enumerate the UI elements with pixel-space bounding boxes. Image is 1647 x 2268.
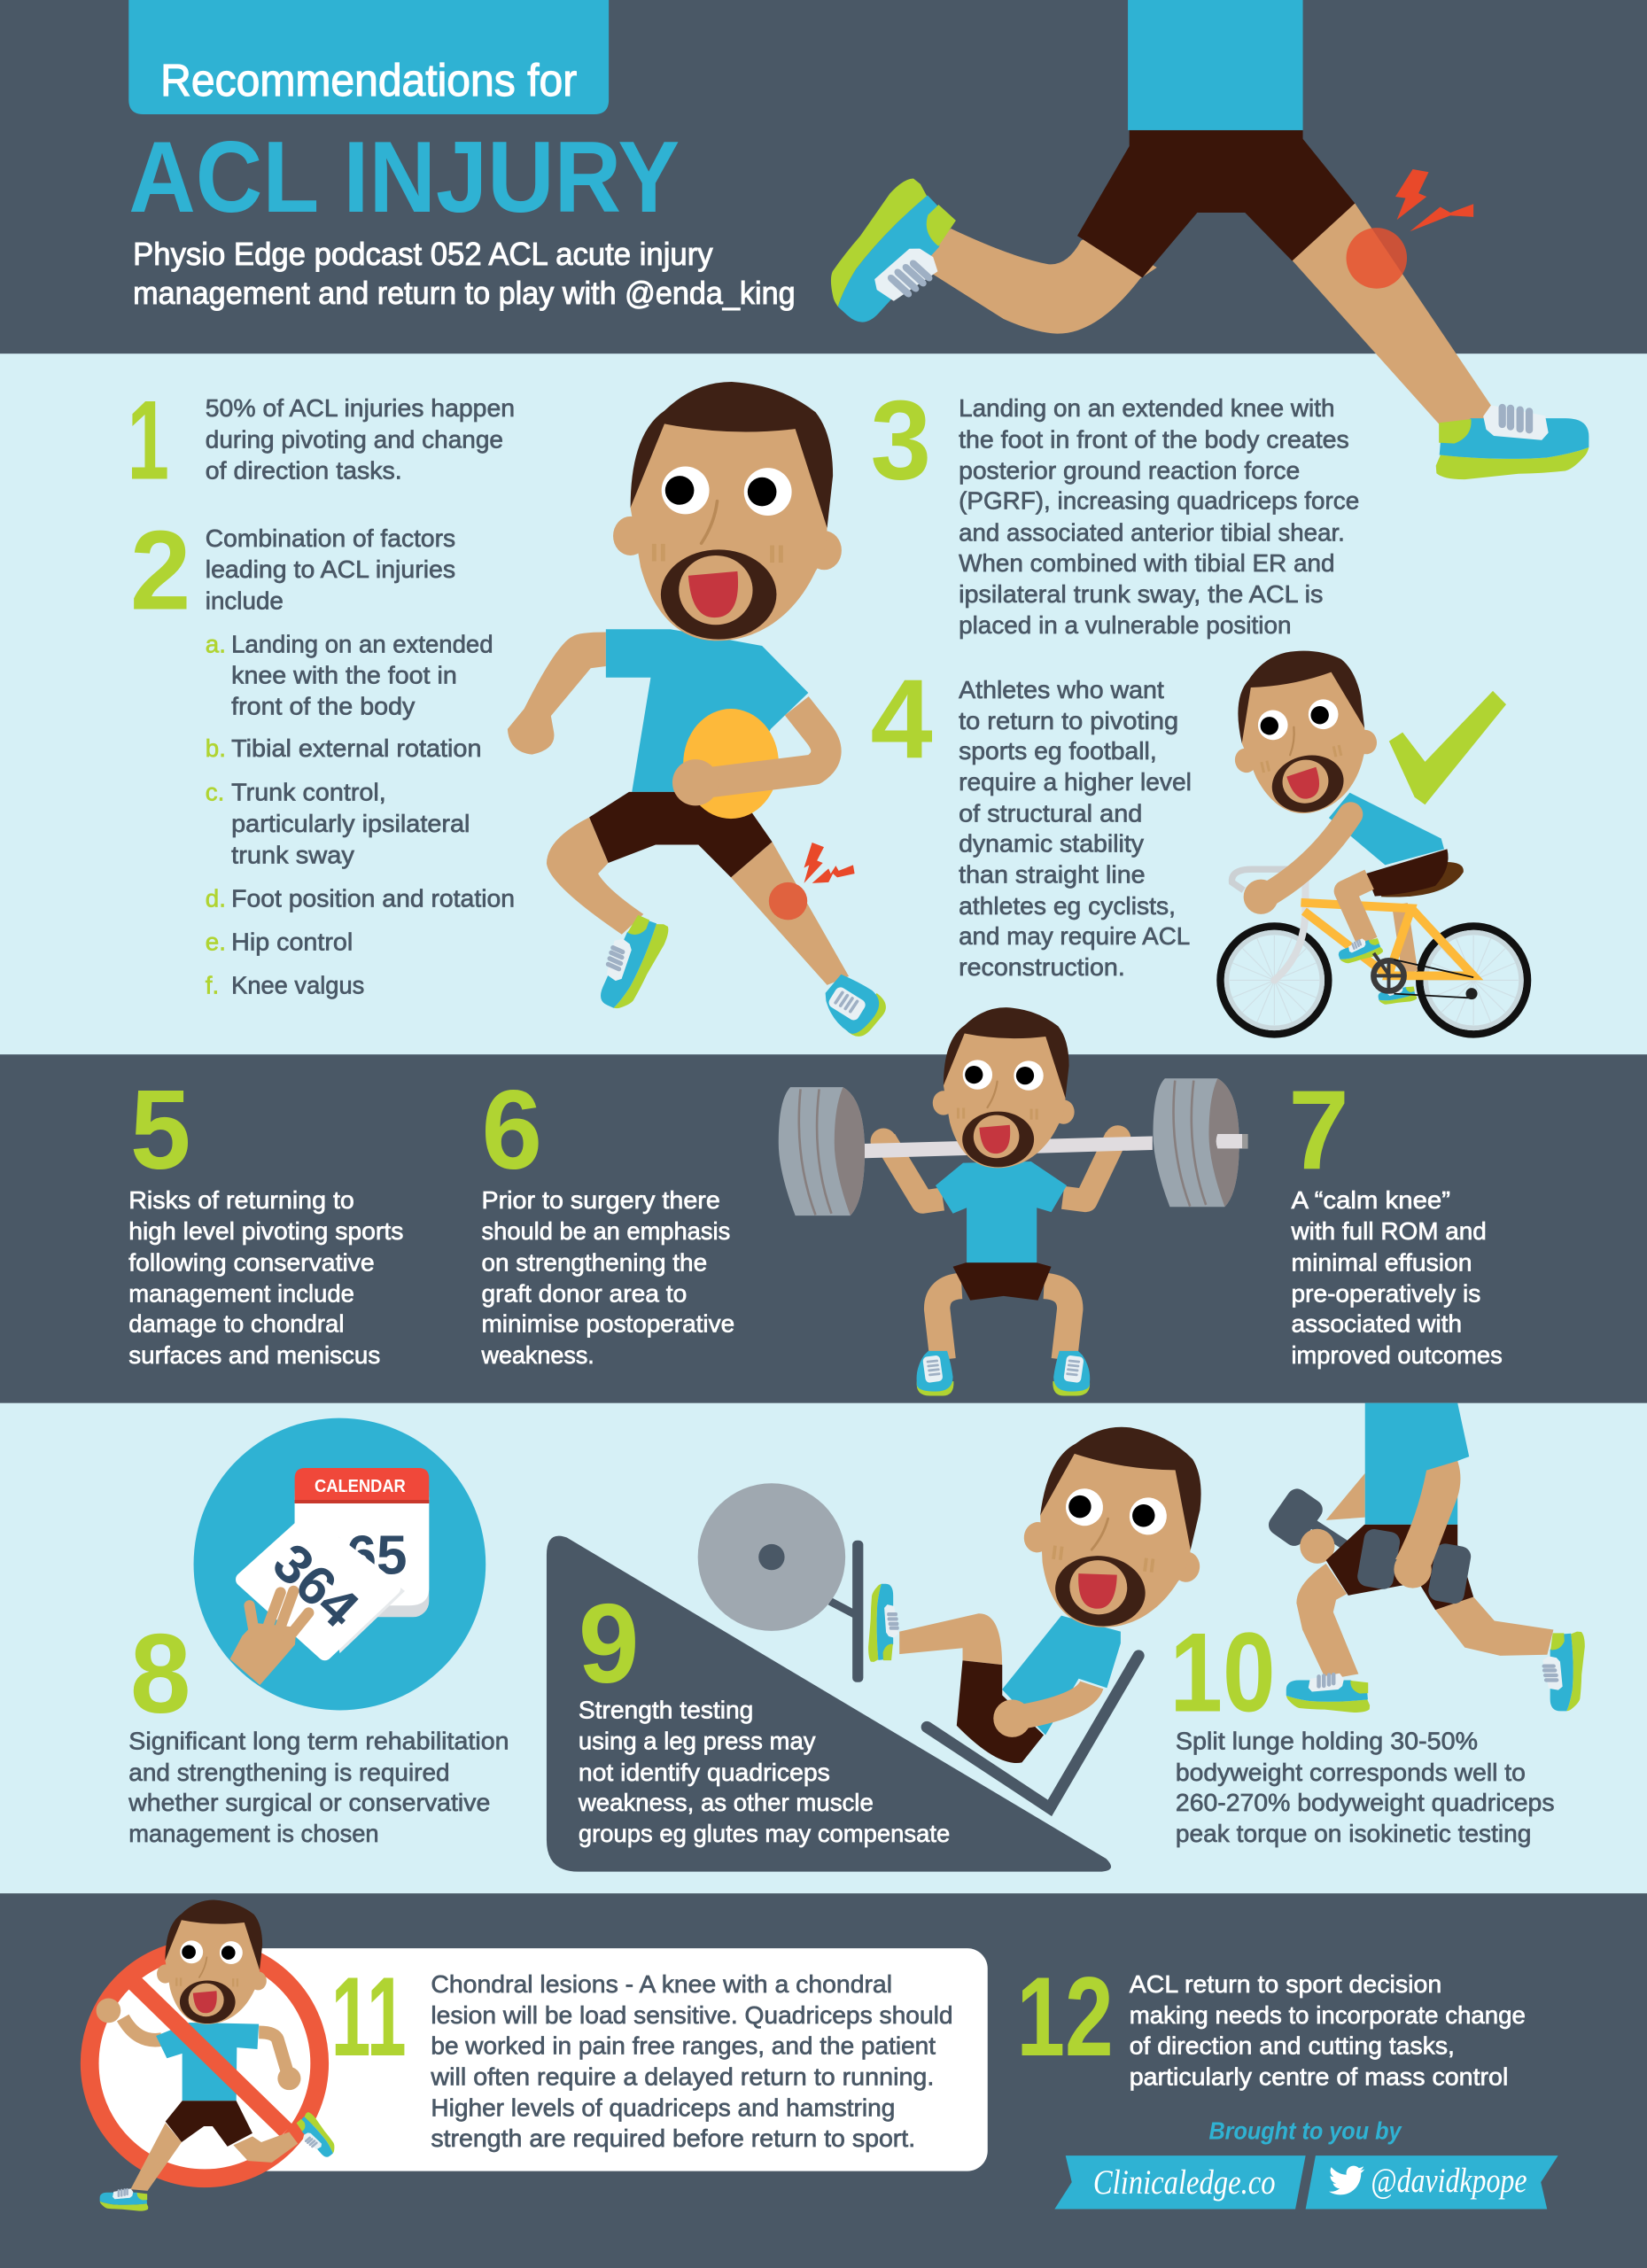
item 6: weakness. (481, 1341, 594, 1369)
item 5: high level pivoting sports (128, 1217, 403, 1245)
item 5: Risks of returning to (128, 1186, 354, 1214)
item 8: and strengthening is required (128, 1759, 450, 1786)
item 3: placed in a vulnerable position (959, 611, 1291, 639)
item 4: to return to pivoting (959, 707, 1178, 734)
item 2: 2 (130, 507, 190, 633)
subtitle: Physio Edge podcast 052 ACL acute injury (133, 236, 713, 272)
item 2: leading to ACL injuries (206, 555, 455, 583)
item 2: Trunk control, (231, 779, 386, 806)
item 7: associated with (1291, 1310, 1462, 1338)
item 3: ipsilateral trunk sway, the ACL is (959, 580, 1323, 608)
illustration: squat with barbell (779, 1007, 1248, 1396)
item 5 (128, 1067, 403, 1369)
item 10: Split lunge holding 30-50% (1176, 1728, 1478, 1755)
item 2: f. (206, 972, 219, 999)
ribbon: Clinicaledge: Clinicaledge.co (1093, 2163, 1276, 2202)
item 7: 7 (1288, 1067, 1349, 1192)
calendar illustration: CALENDAR (315, 1477, 406, 1496)
item 6: 6 (482, 1067, 542, 1192)
item 5: 5 (130, 1067, 190, 1192)
item 4 (871, 656, 1192, 981)
item 2: Knee valgus (231, 972, 364, 999)
item 1: of direction tasks. (206, 456, 402, 484)
item 12: particularly centre of mass control (1130, 2062, 1508, 2090)
item 2: front of the body (231, 693, 416, 720)
item 11 text: Higher levels of quadriceps and hamstring (431, 2094, 895, 2122)
item 12: of direction and cutting tasks, (1130, 2031, 1455, 2059)
item 6: minimise postoperative (482, 1310, 734, 1338)
item 4: reconstruction. (959, 953, 1125, 981)
item 8 (128, 1611, 509, 1847)
item 5: damage to chondral (128, 1310, 344, 1338)
item 4: require a higher level (959, 768, 1192, 796)
item 9: using a leg press may (579, 1728, 816, 1755)
item 2: trunk sway (231, 842, 354, 869)
item 4: of structural and (959, 799, 1142, 827)
item 11 text: Chondral lesions - A knee with a chondral (431, 1970, 892, 1998)
subtitle (133, 236, 796, 311)
item 7 (1288, 1067, 1503, 1369)
item 6: graft donor area to (482, 1279, 687, 1307)
item 2: a. (206, 630, 226, 657)
item 8: 8 (130, 1611, 190, 1736)
item 9: 9 (579, 1581, 639, 1706)
item 3: 3 (871, 377, 931, 502)
item 1: 1 (128, 377, 169, 502)
item 2: c. (206, 779, 224, 806)
item 3: (PGRF), increasing quadriceps force (959, 487, 1359, 515)
item 2: e. (206, 928, 226, 956)
item 6 (481, 1067, 734, 1369)
item 9: Strength testing (579, 1697, 753, 1724)
ribbon: twitter handle: @davidkpope (1371, 2162, 1527, 2200)
item 6: should be an emphasis (482, 1217, 730, 1245)
calendar illustration: 365 (315, 1525, 407, 1586)
item 9 (578, 1581, 950, 1847)
item 11 text: strength are required before return to sport. (431, 2124, 915, 2152)
item 4: dynamic stability (959, 830, 1144, 858)
item 3: Landing on an extended knee with (959, 394, 1334, 422)
illustration: runner holding ball (508, 382, 891, 1042)
title tab: Recommendations for (160, 55, 577, 105)
item 9: weakness, as other muscle (578, 1789, 874, 1816)
item 12: ACL return to sport decision (1130, 1970, 1441, 1998)
subtitle: management and return to play with @enda_king (133, 275, 796, 311)
item 10: peak torque on isokinetic testing (1176, 1820, 1531, 1847)
illustration: no-running sign with runner (89, 1900, 340, 2211)
item 8: Significant long term rehabilitation (128, 1728, 509, 1755)
item 7: A “calm knee” (1291, 1186, 1450, 1214)
item 12 (1016, 1953, 1526, 2090)
item 2: d. (206, 885, 226, 913)
credit heading: Brought to you by (1208, 2117, 1402, 2145)
panel: items 8 to 10 background (0, 1403, 1647, 1893)
item 7: with full ROM and (1290, 1217, 1487, 1245)
item 11 number: 11 (331, 1953, 407, 2079)
ribbon: Clinicaledge (1054, 2155, 1306, 2210)
item 10: 10 (1169, 1609, 1276, 1735)
ribbon: twitter handle (1306, 2155, 1558, 2210)
item 1: 50% of ACL injuries happen (206, 394, 515, 422)
item 2: Hip control (231, 928, 353, 956)
item 5: surfaces and meniscus (128, 1341, 380, 1369)
calendar illustration: 364 (261, 1532, 370, 1640)
title: ACL INJURY (128, 121, 680, 234)
item 2: Combination of factors (206, 524, 455, 552)
item 6: Prior to surgery there (482, 1186, 720, 1214)
item 4: sports eg football, (959, 737, 1157, 765)
item 6: on strengthening the (482, 1248, 707, 1276)
item 2: knee with the foot in (231, 661, 457, 688)
item 9: groups eg glutes may compensate (579, 1820, 950, 1847)
hero illustration: running legs with knee pain (810, 0, 1589, 479)
item 2: include (206, 586, 284, 614)
item 8: management is chosen (128, 1820, 379, 1847)
item 7: improved outcomes (1291, 1341, 1503, 1369)
calendar illustration (194, 1418, 486, 1710)
illustration: cyclist (1214, 637, 1527, 1034)
item 8: whether surgical or conservative (128, 1789, 490, 1816)
icon: green check mark (1389, 691, 1506, 804)
illustration: split lunge with dumbbells (1264, 1403, 1585, 1713)
item 11 text: lesion will be load sensitive. Quadriceps should (431, 2001, 953, 2029)
item 7: pre-operatively is (1291, 1279, 1480, 1307)
item 10 (1169, 1609, 1555, 1847)
item 11 text: be worked in pain free ranges, and the patient (431, 2031, 936, 2059)
item 4: and may require ACL (959, 922, 1190, 950)
item 12: 12 (1016, 1953, 1114, 2079)
item 10: 260-270% bodyweight quadriceps (1176, 1789, 1555, 1816)
item 1: during pivoting and change (206, 425, 503, 453)
item 3: and associated anterior tibial shear. (959, 519, 1345, 547)
item 11 text (430, 1970, 953, 2152)
item 3 (871, 377, 1359, 639)
item 12: making needs to incorporate change (1130, 2001, 1526, 2029)
item 10: bodyweight corresponds well to (1176, 1759, 1526, 1786)
item 3: posterior ground reaction force (959, 456, 1300, 484)
item 2: Tibial external rotation (231, 734, 482, 762)
item 4: 4 (871, 656, 933, 782)
item 9: not identify quadriceps (579, 1759, 830, 1786)
item 2: particularly ipsilateral (231, 810, 470, 837)
item 3: When combined with tibial ER and (959, 549, 1334, 577)
item 5: management include (128, 1279, 354, 1307)
item 2: Landing on an extended (231, 630, 493, 657)
item 11 text: will often require a delayed return to running. (430, 2062, 934, 2090)
item 4: Athletes who want (959, 676, 1164, 703)
title tab (128, 0, 609, 114)
item 3: the foot in front of the body creates (959, 425, 1349, 453)
item 4: athletes eg cyclists, (959, 892, 1176, 920)
item 4: than straight line (959, 861, 1146, 889)
panel: items 1 to 4 background (0, 353, 1647, 1054)
panel: item 11 white card (174, 1948, 988, 2171)
illustration: leg press machine and athlete (698, 1417, 1216, 1808)
item 5: following conservative (128, 1248, 375, 1276)
item 7: minimal effusion (1291, 1248, 1472, 1276)
panel: leg press wedge (547, 1536, 1111, 1872)
item 1 (128, 377, 515, 502)
item 2: Foot position and rotation (231, 885, 515, 913)
item 2 (130, 507, 515, 999)
item 2: b. (206, 734, 226, 762)
